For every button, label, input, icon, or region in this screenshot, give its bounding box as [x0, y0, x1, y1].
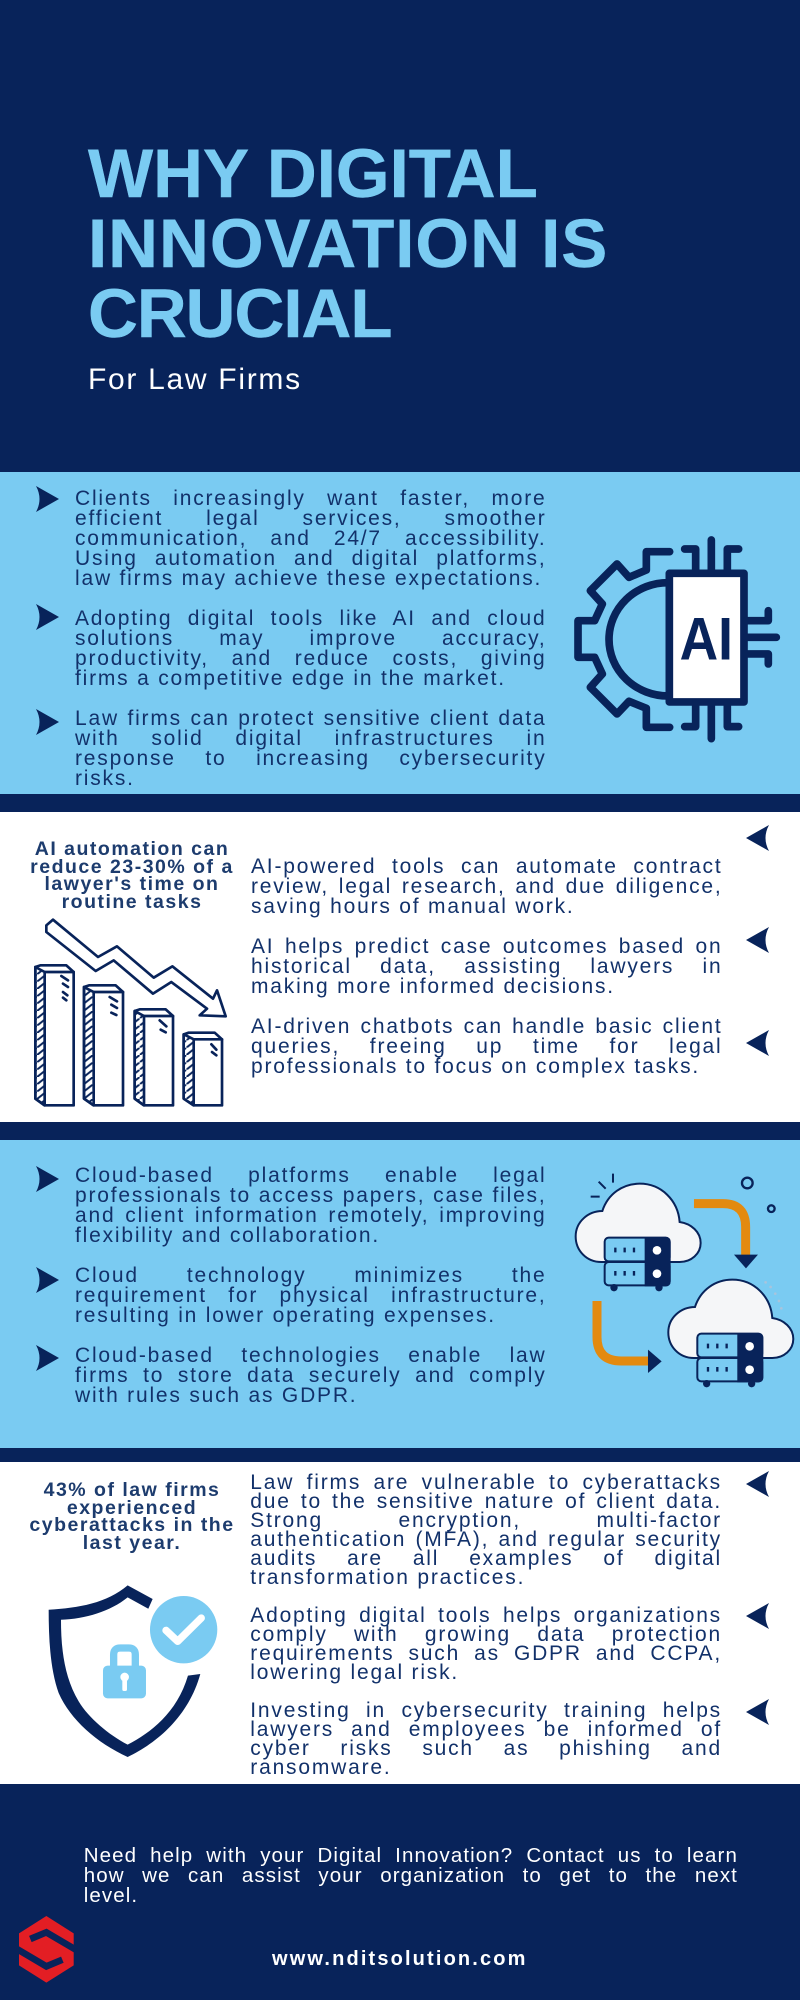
text block: vulnerability: authentication (MFA), and regular security: [250, 1528, 722, 1551]
callout: cyberattack statistic: 43% of law firms: [44, 1479, 220, 1501]
text block: secure storage: firms to store data securely and comply: [75, 1364, 546, 1387]
callout: cyberattack statistic: experienced: [67, 1496, 197, 1518]
text block: digital tools: [75, 607, 546, 690]
bullet arrow: [746, 1603, 769, 1629]
text block: training: cyber risks such as phishing and: [250, 1737, 722, 1760]
callout: AI statistic: lawyer's time on: [45, 873, 219, 895]
text block: secure storage: Cloud-based technologies enable law: [75, 1344, 546, 1367]
icon: AI gear and chip: AI: [680, 605, 733, 672]
text block: lower expenses: Cloud technology minimizes the: [75, 1264, 546, 1287]
text block: client expectations: efficient legal services, smoother: [75, 507, 546, 530]
call to action text: [84, 1844, 738, 1907]
text block: chatbots: queries, freeing up time for legal: [251, 1035, 722, 1058]
logo: [19, 1916, 74, 1983]
panel: why clients expect digital: [0, 472, 800, 794]
callout: cyberattack statistic: last year.: [83, 1532, 181, 1554]
text block: remote access: and client information remotely, improving: [75, 1204, 546, 1227]
text block: predict outcomes: [251, 935, 722, 998]
text block: data protection: Law firms can protect sensitive client data: [75, 707, 546, 730]
bullet arrow: [36, 486, 59, 512]
text block: client expectations: law firms may achieve these expectations.: [75, 567, 542, 590]
bullet arrow: [746, 1471, 769, 1497]
bullet arrow: [36, 1267, 59, 1293]
text block: automate review: review, legal research, and due diligence,: [251, 875, 722, 898]
text block: client expectations: [75, 487, 546, 590]
text block: compliance: [250, 1604, 722, 1684]
icon: shield with lock and check: [48, 1585, 218, 1757]
text block: training: Investing in cybersecurity training helps: [250, 1699, 722, 1722]
call to action text: how we can assist your organization to get to the next: [84, 1864, 738, 1887]
text block: client expectations: Clients increasingly want faster, more: [75, 487, 546, 510]
text block: compliance: requirements such as GDPR and CCPA,: [250, 1642, 722, 1665]
text block: lower expenses: resulting in lower operating expenses.: [75, 1304, 496, 1327]
icon: cloud servers with arrows: [574, 1174, 794, 1388]
text block: secure storage: [75, 1344, 546, 1407]
website url: www.nditsolution.com: [272, 1948, 528, 1970]
text block: automate review: saving hours of manual work.: [251, 895, 575, 918]
text block: vulnerability: [250, 1471, 722, 1589]
callout: AI statistic: routine tasks: [62, 890, 202, 912]
text block: automate review: [251, 855, 722, 918]
text block: lower expenses: requirement for physical infrastructure,: [75, 1284, 546, 1307]
text block: vulnerability: audits are all examples of digital: [250, 1547, 722, 1570]
callout: cyberattack statistic: cyberattacks in the: [29, 1514, 235, 1536]
bullet arrow: [36, 1166, 59, 1192]
text block: remote access: [75, 1164, 546, 1247]
icon: AI gear and chip: [574, 536, 780, 742]
bullet arrow: [36, 709, 59, 735]
text block: secure storage: with rules such as GDPR.: [75, 1384, 357, 1407]
text block: training: [250, 1699, 722, 1779]
footer panel: [0, 1784, 800, 2000]
text block: compliance: lowering legal risk.: [250, 1661, 459, 1684]
text block: remote access: flexibility and collaboration.: [75, 1224, 380, 1247]
callout: AI statistic: AI automation can: [35, 838, 229, 860]
text block: predict outcomes: historical data, assisting lawyers in: [251, 955, 722, 978]
chart icon: declining bars with arrow: [34, 918, 228, 1107]
bullet arrow: [746, 825, 769, 851]
text block: data protection: [75, 707, 546, 790]
bullet arrow: [36, 1345, 59, 1371]
text block: automate review: AI-powered tools can automate contract: [251, 855, 722, 878]
title: WHY DIGITAL: [88, 135, 538, 212]
text block: training: lawyers and employees be informed of: [250, 1718, 722, 1741]
text block: chatbots: [251, 1015, 722, 1078]
callout: AI statistic: reduce 23-30% of a: [30, 856, 234, 878]
panel: cybersecurity: [0, 1462, 800, 1784]
title: INNOVATION IS: [88, 205, 608, 282]
call to action text: Need help with your Digital Innovation? Contact us to learn: [84, 1844, 738, 1867]
header panel: [0, 0, 800, 472]
bullet arrow: [746, 1030, 769, 1056]
text block: lower expenses: [75, 1264, 546, 1327]
title: CRUCIAL: [88, 275, 391, 352]
text block: digital tools: firms a competitive edge in the market.: [75, 667, 506, 690]
subtitle: For Law Firms: [88, 363, 302, 396]
text block: vulnerability: transformation practices.: [250, 1566, 525, 1589]
text block: data protection: with solid digital infrastructures in: [75, 727, 546, 750]
text block: predict outcomes: making more informed decisions.: [251, 975, 615, 998]
bullet arrow: [746, 1699, 769, 1725]
text block: training: ransomware.: [250, 1756, 391, 1779]
callout: cyberattack statistic: [29, 1479, 235, 1554]
bullet arrow: [36, 604, 59, 630]
text block: client expectations: Using automation and digital platforms,: [75, 547, 546, 570]
text block: digital tools: Adopting digital tools like AI and cloud: [75, 607, 546, 630]
text block: chatbots: professionals to focus on complex tasks.: [251, 1055, 700, 1078]
text block: vulnerability: Law firms are vulnerable to cyberattacks: [250, 1471, 722, 1494]
text block: digital tools: productivity, and reduce costs, giving: [75, 647, 546, 670]
text block: data protection: risks.: [75, 767, 135, 790]
panel: cloud technology: [0, 1140, 800, 1448]
text block: vulnerability: due to the sensitive nature of client data.: [250, 1490, 722, 1513]
bullet arrow: [746, 927, 769, 953]
text block: predict outcomes: AI helps predict case outcomes based on: [251, 935, 722, 958]
text block: vulnerability: Strong encryption, multi-factor: [250, 1509, 722, 1532]
text block: data protection: response to increasing cybersecurity: [75, 747, 546, 770]
text block: client expectations: communication, and 24/7 accessibility.: [75, 527, 546, 550]
text block: remote access: Cloud-based platforms enable legal: [75, 1164, 546, 1187]
callout: AI statistic: [30, 838, 234, 912]
text block: compliance: Adopting digital tools helps organizations: [250, 1604, 722, 1627]
text block: remote access: professionals to access papers, case files,: [75, 1184, 546, 1207]
text block: chatbots: AI-driven chatbots can handle basic client: [251, 1015, 722, 1038]
panel: AI automation: [0, 812, 800, 1122]
call to action text: level.: [84, 1884, 138, 1907]
text block: compliance: comply with growing data protection: [250, 1623, 722, 1646]
title: [88, 135, 608, 352]
text block: digital tools: solutions may improve accuracy,: [75, 627, 546, 650]
